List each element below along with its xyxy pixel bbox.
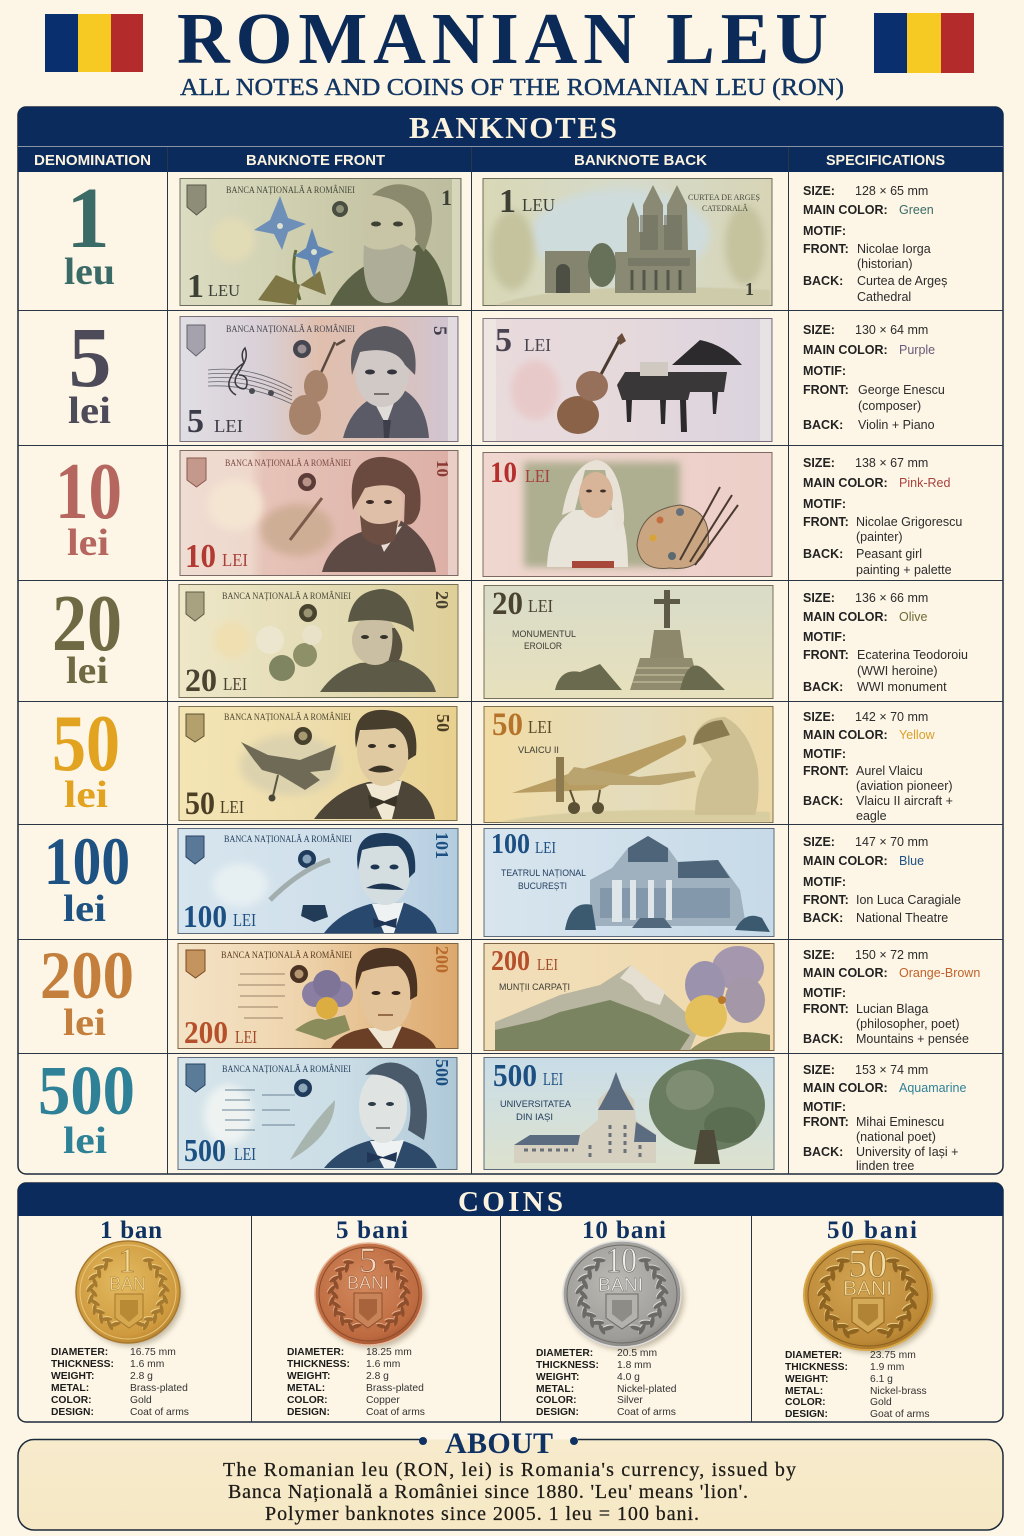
- denomination 1 leu: [64, 169, 115, 293]
- specifications: 500 lei: MAIN COLOR:: [803, 1081, 888, 1095]
- specifications: 500 lei: Aquamarine: [899, 1081, 966, 1095]
- panel: coins: [18, 1183, 1003, 1422]
- banknote: 10 lei front: 10: [185, 538, 216, 575]
- specifications: 5 lei: MOTIF:: [803, 364, 846, 378]
- coins header band: [18, 1183, 1003, 1216]
- specifications: 10 lei: [803, 456, 962, 577]
- coin card: 1 ban: 1 ban: [100, 1217, 162, 1244]
- denomination 1 leu: 1: [66, 169, 110, 266]
- coin specs: 5 bani: [287, 1347, 425, 1418]
- banknote: 50 lei back: LEI: [528, 717, 552, 737]
- banknote: 100 lei front: 101: [432, 832, 452, 859]
- denomination 5 lei: lei: [68, 390, 111, 432]
- coin card: 1 ban: BAN: [109, 1274, 146, 1294]
- denomination 200 lei: lei: [63, 1002, 106, 1044]
- table grid: [18, 147, 1003, 1174]
- heading: about: ABOUT: [445, 1427, 553, 1460]
- heading: banknotes: BANKNOTES: [409, 110, 617, 145]
- banknote: 200 lei front: LEI: [235, 1027, 257, 1047]
- column headers: BANKNOTE FRONT: [246, 152, 385, 169]
- coin card: 50 bani: 50: [848, 1241, 887, 1286]
- denomination 500 lei: 500: [38, 1053, 135, 1130]
- specifications: 50 lei: Yellow: [899, 728, 936, 742]
- banknote: 20 lei back: LEI: [528, 596, 553, 616]
- specifications: 50 lei: MAIN COLOR:: [803, 728, 888, 742]
- banknote: 100 lei front: 100: [183, 898, 227, 934]
- specifications: 1 leu: [803, 184, 947, 304]
- specifications: 1 leu: SIZE:: [803, 184, 835, 198]
- banknote: 10 lei front: [180, 450, 458, 576]
- banknote: 20 lei front: BANCA NAȚIONALĂ A ROMÂNIEI: [222, 591, 351, 602]
- specifications: 5 lei: Purple: [899, 343, 935, 357]
- coin specs: 10 bani: Nickel-plated: [617, 1384, 677, 1395]
- specifications: 1 leu: MAIN COLOR:: [803, 203, 888, 217]
- coin specs: 50 bani: [785, 1350, 930, 1420]
- banknote: 50 lei front: 50: [433, 714, 453, 732]
- icon: right heading dot: [570, 1437, 578, 1445]
- specifications: 10 lei: 138 × 67 mm: [855, 456, 928, 470]
- specifications: 200 lei: 150 × 72 mm: [855, 948, 928, 962]
- specifications: 100 lei: SIZE:: [803, 835, 835, 849]
- specifications: 10 lei: FRONT:: [803, 515, 849, 529]
- banknote: 50 lei front: [179, 706, 457, 822]
- coin card: 50 bani: 50 bani: [827, 1217, 917, 1244]
- coin specs: 10 bani: 1.8 mm: [617, 1360, 651, 1371]
- specifications: 1 leu: 128 × 65 mm: [855, 184, 928, 198]
- coin specs: 1 ban: Gold: [130, 1395, 152, 1406]
- specifications: 500 lei: [803, 1063, 966, 1173]
- specifications: 1 leu: Nicolae Iorga: [857, 242, 931, 256]
- specifications: 100 lei: Ion Luca Caragiale: [856, 893, 961, 907]
- banknote: 20 lei back: MONUMENTUL: [512, 629, 576, 640]
- about text: Polymer banknotes since 2005. 1 leu = 100 bani.: [265, 1503, 699, 1525]
- coin specs: 50 bani: Nickel-brass: [870, 1386, 927, 1397]
- banknote: 200 lei front: 200: [432, 946, 452, 973]
- denomination 500 lei: lei: [63, 1120, 107, 1162]
- banknote: 500 lei back: 500: [493, 1057, 537, 1093]
- coin specs: 10 bani: WEIGHT:: [536, 1372, 579, 1383]
- banknote: 50 lei back: [484, 706, 773, 822]
- specifications: 10 lei: painting + palette: [856, 563, 952, 577]
- banknote: 1 leu back: CATEDRALĂ: [702, 203, 749, 213]
- specifications: 20 lei: Ecaterina Teodoroiu: [857, 648, 968, 662]
- specifications: 50 lei: FRONT:: [803, 764, 849, 778]
- column headers: DENOMINATION: [34, 152, 151, 169]
- specifications: 100 lei: FRONT:: [803, 893, 849, 907]
- banknote: 200 lei back: 200: [491, 946, 530, 977]
- specifications: 500 lei: Mihai Eminescu: [856, 1115, 944, 1129]
- coin column dividers: [252, 1216, 752, 1422]
- banknote: 500 lei front: 500: [184, 1132, 226, 1168]
- specifications: 1 leu: Curtea de Argeș: [857, 274, 947, 288]
- title: ROMANIAN LEU: [177, 0, 828, 79]
- banknote: 200 lei front: 200: [184, 1014, 228, 1050]
- specifications: 200 lei: (philosopher, poet): [856, 1017, 960, 1031]
- specifications: 500 lei: University of Iași +: [856, 1145, 958, 1159]
- coin specs: 10 bani: 20.5 mm: [617, 1348, 657, 1359]
- banknote: 1 leu back: CURTEA DE ARGEȘ: [688, 192, 760, 202]
- coin specs: 5 bani: Coat of arms: [366, 1407, 425, 1418]
- coin card: 5 bani: BANI: [347, 1273, 389, 1293]
- banknote: 200 lei back: MUNȚII CARPAȚI: [499, 982, 570, 993]
- banknote: 1 leu front: [180, 178, 461, 306]
- banknote: 100 lei back: 100: [491, 829, 530, 860]
- specifications: 5 lei: [803, 323, 945, 432]
- denomination 10 lei: lei: [67, 522, 109, 564]
- specifications: 500 lei: 153 × 74 mm: [855, 1063, 928, 1077]
- coin specs: 50 bani: Gold: [870, 1397, 892, 1408]
- denomination 200 lei: 200: [40, 937, 134, 1013]
- specifications: 5 lei: George Enescu: [858, 383, 945, 397]
- specifications: 20 lei: (WWI heroine): [857, 664, 938, 678]
- specifications: 1 leu: FRONT:: [803, 242, 849, 256]
- coin card: 50 bani: BANI: [843, 1278, 892, 1300]
- banknote: 5 lei back: LEI: [524, 335, 551, 355]
- specifications: 200 lei: Mountains + pensée: [856, 1032, 969, 1046]
- banknote: 1 leu front: 1: [441, 185, 452, 210]
- coin specs: 10 bani: THICKNESS:: [536, 1360, 599, 1371]
- banknote: 20 lei back: [484, 586, 773, 698]
- banknote: 500 lei back: UNIVERSITATEA: [500, 1099, 572, 1110]
- specifications: 500 lei: BACK:: [803, 1145, 843, 1159]
- banknote: 10 lei back: LEI: [525, 466, 550, 486]
- coin specs: 50 bani: 6.1 g: [870, 1374, 893, 1385]
- coin specs: 50 bani: THICKNESS:: [785, 1362, 848, 1373]
- banknote: 10 lei back: [483, 452, 772, 576]
- coin card: 50 bani: [804, 1217, 935, 1353]
- coin specs: 1 ban: COLOR:: [51, 1395, 92, 1406]
- coin specs: 50 bani: METAL:: [785, 1386, 823, 1397]
- banknote: 20 lei front: 20: [185, 663, 217, 699]
- banknote: 1 leu back: 1: [745, 279, 754, 299]
- banknote: 1 leu back: [483, 178, 772, 306]
- coin specs: 10 bani: METAL:: [536, 1384, 574, 1395]
- coin specs: 1 ban: DESIGN:: [51, 1407, 94, 1418]
- specifications: 10 lei: (painter): [856, 530, 903, 544]
- banknote: 500 lei front: LEI: [234, 1144, 256, 1164]
- banknote: 5 lei front: 5: [429, 326, 450, 336]
- specifications: 50 lei: Vlaicu II aircraft +: [856, 794, 953, 808]
- denomination 10 lei: [55, 448, 122, 564]
- coin card: 5 bani: [315, 1217, 426, 1348]
- coin specs: 10 bani: 4.0 g: [617, 1372, 640, 1383]
- denomination 100 lei: [44, 823, 130, 930]
- about text: Banca Națională a României since 1880. 'Leu' means 'lion'.: [228, 1481, 748, 1503]
- specifications: 5 lei: BACK:: [803, 418, 843, 432]
- specifications: 200 lei: Orange-Brown: [899, 966, 980, 980]
- coin card: 10 bani: 10: [606, 1240, 637, 1280]
- denomination 200 lei: [40, 937, 134, 1044]
- coin specs: 1 ban: 16.75 mm: [130, 1347, 176, 1358]
- denomination 500 lei: [38, 1053, 135, 1162]
- specifications: 200 lei: BACK:: [803, 1032, 843, 1046]
- specifications: 500 lei: (national poet): [856, 1130, 936, 1144]
- header divider: [18, 146, 1003, 148]
- denomination 50 lei: 50: [52, 700, 120, 788]
- coin specs: 1 ban: Coat of arms: [130, 1407, 189, 1418]
- coin specs: 10 bani: Silver: [617, 1395, 643, 1406]
- coin specs: 1 ban: [51, 1347, 189, 1418]
- banknote: 1 leu front: LEU: [208, 281, 240, 300]
- coin specs: 5 bani: DESIGN:: [287, 1407, 330, 1418]
- banknote: 100 lei back: [484, 828, 774, 936]
- banknote: 1 leu back: LEU: [522, 195, 555, 215]
- banknote: 5 lei front: LEI: [214, 416, 243, 436]
- coin specs: 1 ban: WEIGHT:: [51, 1371, 94, 1382]
- specifications: 5 lei: SIZE:: [803, 323, 835, 337]
- specifications: 10 lei: BACK:: [803, 547, 843, 561]
- banknote: 1 leu front: BANCA NAȚIONALĂ A ROMÂNIEI: [226, 185, 355, 196]
- specifications: 100 lei: [803, 835, 961, 925]
- coin specs: 10 bani: COLOR:: [536, 1395, 577, 1406]
- banknote: 50 lei front: LEI: [220, 797, 244, 817]
- banknote: 100 lei back: BUCUREȘTI: [518, 881, 567, 892]
- coin card: 1 ban: [76, 1217, 183, 1346]
- coin specs: 1 ban: 1.6 mm: [130, 1359, 164, 1370]
- specifications: 100 lei: BACK:: [803, 911, 843, 925]
- specifications: 200 lei: Lucian Blaga: [856, 1002, 928, 1016]
- coin card: 10 bani: BANI: [598, 1275, 643, 1295]
- banknote: 200 lei back: [484, 944, 774, 1050]
- specifications: 1 leu: MOTIF:: [803, 224, 846, 238]
- icon: left heading dot: [419, 1437, 427, 1445]
- specifications: 5 lei: MAIN COLOR:: [803, 343, 888, 357]
- banknote: 500 lei front: [178, 1058, 457, 1170]
- specifications: 100 lei: MOTIF:: [803, 875, 846, 889]
- specifications: 1 leu: BACK:: [803, 274, 843, 288]
- specifications: 20 lei: FRONT:: [803, 648, 849, 662]
- coin specs: 1 ban: Brass-plated: [130, 1383, 188, 1394]
- about text: The Romanian leu (RON, lei) is Romania's currency, issued by: [223, 1459, 796, 1481]
- specifications: 5 lei: (composer): [858, 399, 921, 413]
- specifications: 200 lei: [803, 948, 980, 1046]
- coin specs: 50 bani: Goat of arms: [870, 1409, 930, 1420]
- coin card: 5 bani: 5: [359, 1240, 377, 1280]
- column headers: [34, 152, 945, 169]
- specifications: 200 lei: FRONT:: [803, 1002, 849, 1016]
- coin specs: 10 bani: [536, 1348, 677, 1418]
- denomination 50 lei: lei: [64, 774, 108, 816]
- specifications: 500 lei: MOTIF:: [803, 1100, 846, 1114]
- coin specs: 5 bani: 1.6 mm: [366, 1359, 400, 1370]
- specifications: 5 lei: 130 × 64 mm: [855, 323, 928, 337]
- coin specs: 5 bani: DIAMETER:: [287, 1347, 344, 1358]
- specifications: 10 lei: Pink-Red: [899, 476, 950, 490]
- specifications: 20 lei: SIZE:: [803, 591, 835, 605]
- specifications: 20 lei: BACK:: [803, 680, 843, 694]
- coin specs: 1 ban: DIAMETER:: [51, 1347, 108, 1358]
- banknote: 20 lei front: [179, 584, 458, 699]
- specifications: 1 leu: (historian): [857, 257, 913, 271]
- banknote: 50 lei front: 50: [185, 786, 215, 822]
- specifications: 1 leu: Cathedral: [857, 290, 911, 304]
- banknote: 500 lei back: [484, 1057, 774, 1170]
- specifications: 50 lei: SIZE:: [803, 710, 835, 724]
- column headers: BANKNOTE BACK: [574, 152, 707, 169]
- specifications: 500 lei: linden tree: [856, 1159, 914, 1173]
- banknote: 500 lei front: 500: [432, 1059, 452, 1086]
- banknote: 10 lei back: 10: [490, 456, 517, 489]
- banknote: 50 lei back: VLAICU II: [518, 745, 559, 756]
- banknote: 100 lei front: [178, 828, 458, 934]
- banknote: 100 lei back: TEATRUL NAȚIONAL: [501, 868, 586, 879]
- specifications: 10 lei: MAIN COLOR:: [803, 476, 888, 490]
- coin specs: 1 ban: THICKNESS:: [51, 1359, 114, 1370]
- about text: [223, 1459, 796, 1525]
- denomination 10 lei: 10: [55, 448, 122, 536]
- banknote: 1 leu front: 1: [187, 268, 204, 305]
- coin specs: 50 bani: DESIGN:: [785, 1409, 828, 1420]
- coin specs: 5 bani: METAL:: [287, 1383, 325, 1394]
- coin specs: 1 ban: METAL:: [51, 1383, 89, 1394]
- coin specs: 10 bani: DIAMETER:: [536, 1348, 593, 1359]
- banknote: 100 lei front: BANCA NAȚIONALĂ A ROMÂNIEI: [224, 834, 352, 845]
- banknote: 20 lei back: EROILOR: [524, 641, 562, 652]
- banknote: 20 lei front: LEI: [223, 674, 247, 694]
- denomination 100 lei: lei: [63, 888, 106, 930]
- denomination 5 lei: 5: [68, 309, 112, 405]
- specifications: 100 lei: National Theatre: [856, 911, 948, 925]
- specifications: 20 lei: MAIN COLOR:: [803, 610, 888, 624]
- specifications: 5 lei: Violin + Piano: [858, 418, 935, 432]
- specifications: 20 lei: 136 × 66 mm: [855, 591, 928, 605]
- coin card: 1 ban: 1: [118, 1241, 136, 1280]
- specifications: 10 lei: SIZE:: [803, 456, 835, 470]
- heading: coins: COINS: [458, 1186, 563, 1218]
- specifications: 1 leu: Green: [899, 203, 934, 217]
- coin specs: 5 bani: WEIGHT:: [287, 1371, 330, 1382]
- denomination 100 lei: 100: [44, 823, 130, 899]
- banknote: 10 lei front: BANCA NAȚIONALĂ A ROMÂNIEI: [225, 458, 351, 469]
- coin card: 5 bani: 5 bani: [336, 1217, 408, 1244]
- banknote: 200 lei back: LEI: [537, 955, 558, 974]
- coin specs: 50 bani: 1.9 mm: [870, 1362, 904, 1373]
- specifications: 50 lei: Aurel Vlaicu: [856, 764, 923, 778]
- column headers: SPECIFICATIONS: [826, 152, 945, 169]
- specifications: 50 lei: BACK:: [803, 794, 843, 808]
- specifications: 200 lei: MOTIF:: [803, 986, 846, 1000]
- specifications: 10 lei: MOTIF:: [803, 497, 846, 511]
- specifications: 100 lei: 147 × 70 mm: [855, 835, 928, 849]
- specifications: 20 lei: [803, 591, 968, 694]
- banknote: 1 leu back: 1: [499, 183, 516, 220]
- banknote: 50 lei back: 50: [492, 707, 523, 743]
- specifications: 20 lei: Olive: [899, 610, 928, 624]
- specifications: 50 lei: 142 × 70 mm: [855, 710, 928, 724]
- panel: about: [18, 1427, 1003, 1530]
- specifications: 20 lei: WWI monument: [857, 680, 947, 694]
- coin specs: 5 bani: COLOR:: [287, 1395, 328, 1406]
- coin specs: 50 bani: DIAMETER:: [785, 1350, 842, 1361]
- specifications: 10 lei: Peasant girl: [856, 547, 922, 561]
- specifications: 200 lei: SIZE:: [803, 948, 835, 962]
- banknote: 10 lei front: 10: [433, 460, 452, 477]
- coin card: 10 bani: [563, 1217, 684, 1350]
- panel: banknotes table: [18, 107, 1003, 1174]
- specifications: 10 lei: Nicolae Grigorescu: [856, 515, 962, 529]
- coin specs: 10 bani: Coat of arms: [617, 1407, 676, 1418]
- banknote: 50 lei front: BANCA NAȚIONALĂ A ROMÂNIEI: [224, 712, 351, 723]
- coin specs: 50 bani: COLOR:: [785, 1397, 826, 1408]
- specifications: 500 lei: SIZE:: [803, 1063, 835, 1077]
- coin specs: 50 bani: 23.75 mm: [870, 1350, 916, 1361]
- banknote: 200 lei front: BANCA NAȚIONALĂ A ROMÂNIEI: [221, 950, 352, 961]
- coin specs: 50 bani: WEIGHT:: [785, 1374, 828, 1385]
- denomination 50 lei: [52, 700, 120, 816]
- coin specs: 1 ban: 2.8 g: [130, 1371, 153, 1382]
- coin specs: 5 bani: 2.8 g: [366, 1371, 389, 1382]
- specifications: 200 lei: MAIN COLOR:: [803, 966, 888, 980]
- banknote: 5 lei front: BANCA NAȚIONALĂ A ROMÂNIEI: [226, 324, 355, 335]
- specifications: 500 lei: FRONT:: [803, 1115, 849, 1129]
- banknote: 20 lei front: 20: [432, 591, 452, 609]
- banknote: 10 lei front: LEI: [222, 550, 248, 570]
- coin card: 10 bani: 10 bani: [582, 1217, 666, 1244]
- coin specs: 5 bani: Brass-plated: [366, 1383, 424, 1394]
- banknote: 100 lei back: LEI: [535, 838, 556, 857]
- coin specs: 5 bani: THICKNESS:: [287, 1359, 350, 1370]
- banknotes header band: [18, 107, 1003, 172]
- banknote: 100 lei front: LEI: [233, 910, 256, 930]
- banknote: 5 lei back: 5: [495, 322, 512, 359]
- specifications: 20 lei: MOTIF:: [803, 630, 846, 644]
- specifications: 5 lei: FRONT:: [803, 383, 849, 397]
- specifications: 50 lei: [803, 710, 953, 823]
- specifications: 50 lei: MOTIF:: [803, 747, 846, 761]
- banknote: 5 lei front: [180, 316, 458, 442]
- specifications: 50 lei: eagle: [856, 809, 887, 823]
- subtitle: ALL NOTES AND COINS OF THE ROMANIAN LEU (RON): [180, 75, 844, 101]
- coin specs: 5 bani: 18.25 mm: [366, 1347, 412, 1358]
- banknote: 200 lei front: [178, 944, 458, 1050]
- banknote: 5 lei front: 5: [187, 403, 204, 440]
- specifications: 100 lei: Blue: [899, 854, 924, 868]
- banknote: 5 lei back: [483, 318, 772, 442]
- banknote: 500 lei front: BANCA NAȚIONALĂ A ROMÂNIEI: [222, 1064, 351, 1075]
- coin specs: 10 bani: DESIGN:: [536, 1407, 579, 1418]
- specifications: 50 lei: (aviation pioneer): [856, 779, 953, 793]
- banknote: 20 lei back: 20: [492, 586, 523, 622]
- specifications: 100 lei: MAIN COLOR:: [803, 854, 888, 868]
- denomination 20 lei: 20: [52, 580, 122, 668]
- icon: Romanian flag left: [45, 14, 143, 72]
- banknote: 500 lei back: DIN IAȘI: [516, 1112, 553, 1123]
- denomination 20 lei: lei: [66, 650, 108, 692]
- icon: Romanian flag right: [874, 13, 974, 73]
- coin specs: 5 bani: Copper: [366, 1395, 400, 1406]
- denomination 1 leu: leu: [64, 251, 115, 293]
- banknote: 500 lei back: LEI: [543, 1069, 563, 1089]
